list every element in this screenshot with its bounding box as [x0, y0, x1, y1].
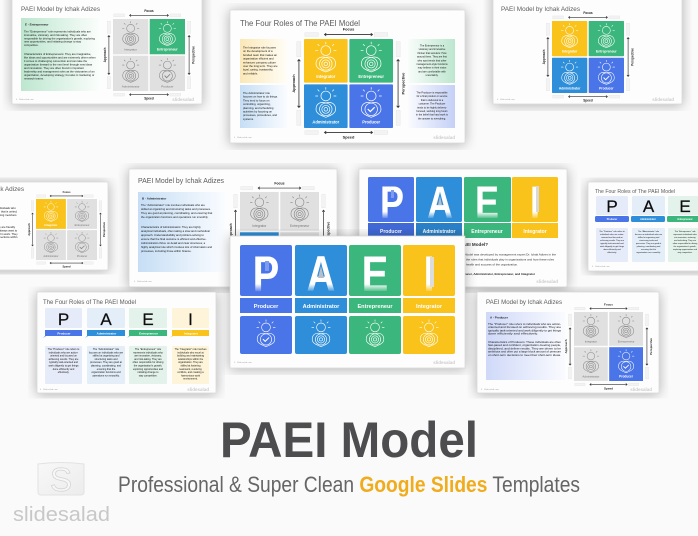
panel: producer description: The "Producer" role refers to individuals who are action- — [488, 322, 561, 326]
panel: entrepreneur description: competitive. — [24, 43, 39, 47]
matrix: four coloured roles: Producer — [362, 120, 381, 125]
card: Integrator: teamwork, resolving — [179, 368, 202, 371]
panel: entrepreneur description: innovative, visionary, and risk-taking. They are often — [24, 33, 88, 37]
panel: administrator description: The "Administrator" role involves individuals who are — [141, 203, 205, 207]
panel: integrator text: enhances company culture — [243, 60, 276, 64]
card: Producer: P — [606, 197, 618, 216]
card: Entrepreneur: exploring opportunities and — [133, 368, 164, 371]
card: Producer: P — [58, 310, 69, 329]
card: Producer: oriented and focused on — [601, 236, 623, 239]
card: Producer: typically task-oriented and — [49, 361, 79, 364]
card: Integrator: The "Integrator" role involves — [174, 348, 207, 351]
card: Administrator: structuring tasks and — [639, 239, 658, 242]
panel: producer text: in the belief that hard work is — [416, 114, 449, 117]
matrix: entrepreneur highlighted: Perspective — [191, 46, 195, 64]
matrix: administrator highlighted — [229, 181, 330, 277]
panel: administrator text: They tend to focus on — [243, 98, 270, 102]
panel: entrepreneur text: thinker that wonders: How — [418, 52, 447, 55]
panel: producer text: The Producer is responsible — [416, 92, 448, 94]
card: Administrator: organization functions and — [91, 371, 121, 374]
slide sheet — [477, 292, 659, 393]
panel: integrator text: The Integrator role focuses — [243, 46, 276, 50]
card: Integrator: organization. They are — [178, 361, 204, 364]
matrix: integrator highlighted: Approach — [27, 223, 31, 236]
role label Producer — [368, 223, 414, 238]
card: Integrator: harmonious work — [181, 374, 201, 377]
matrix: entrepreneur highlighted: Speed — [144, 97, 154, 101]
panel: administrator description: ensure that the final outcome is efficient and effective. — [141, 237, 207, 241]
footer: 4 Slidesalad.com — [592, 266, 610, 268]
card: Entrepreneur: E — [679, 197, 691, 216]
slide title: PAEI Model by Ichak Adizes — [21, 6, 101, 13]
panel: administrator text: controlling, organizing, — [243, 102, 271, 106]
card: Producer: achieving results. They are — [49, 358, 79, 361]
panel: administrator text: processes, procedures, and — [243, 113, 277, 117]
slide sheet — [493, 0, 682, 104]
slide: four role cards (right edge) — [588, 182, 698, 271]
matrix: administrator highlighted: Perspective — [326, 222, 330, 241]
slide: four role cards (bottom left) — [37, 292, 216, 393]
footer: 4 Slidesalad.com — [234, 137, 252, 139]
panel: producer text — [408, 85, 455, 128]
panel: administrator description: analytical individuals, often taking a slow and methodical — [141, 229, 210, 233]
panel: entrepreneur description: organization forward to the next level through new ideas — [24, 62, 93, 66]
panel: entrepreneur text — [408, 39, 455, 83]
card: Integrator: individuals who excel at — [177, 351, 204, 354]
matrix: four coloured roles: Perspective — [401, 72, 406, 94]
card: Administrator: ensuring that the — [97, 368, 116, 371]
matrix: administrator highlighted: Focus — [274, 181, 285, 185]
card: Administrator: processes. They are good at — [90, 361, 122, 364]
matrix: producer highlighted — [564, 302, 653, 390]
matrix: four coloured roles: Focus — [583, 11, 593, 15]
card: Entrepreneur: Entrepreneur — [139, 332, 159, 336]
panel: producer description: Characteristics of Producers: These individuals are often — [488, 340, 561, 344]
panel: entrepreneur text: management-style functions — [416, 63, 448, 66]
matrix: producer highlighted: Perspective — [649, 338, 653, 355]
card: Entrepreneur — [667, 196, 698, 262]
card: Entrepreneur: are innovative, visionary, — [134, 355, 162, 358]
panel: producer description: done efficiently and effectively. — [488, 332, 538, 336]
panel: producer text: tends to be highly delivery- — [417, 106, 447, 109]
matrix: four coloured roles: Speed — [343, 135, 355, 140]
slide sheet — [12, 0, 202, 104]
matrix: producer highlighted: Producer — [619, 375, 634, 379]
card: Integrator: relationships within the — [178, 358, 204, 361]
card: Entrepreneur: the organization's growth, — [674, 245, 697, 248]
panel: administrator description: the organization functions and operations run smoothly. — [141, 215, 209, 219]
footer: 4 Slidesalad.com — [16, 99, 34, 101]
matrix: producer highlighted: Focus — [604, 302, 613, 306]
matrix: four coloured roles: Entrepreneur — [358, 74, 384, 79]
subtitle: Professional & Super Clean Google Slides Templates — [118, 472, 580, 497]
panel: producer description: fast-paced and confident, organization-meeting people, — [488, 343, 561, 347]
panel: administrator description: B - Administrator — [142, 196, 167, 200]
slide sheet — [37, 292, 216, 393]
column: Producer — [240, 245, 292, 354]
card: Producer: done efficiently and — [603, 248, 621, 251]
card: Producer: work diligently to get things — [600, 245, 624, 248]
card: Entrepreneur: E — [142, 310, 154, 329]
panel: administrator description: processes, including those within finance. — [141, 249, 192, 253]
card: Producer: Producer — [57, 332, 71, 336]
panel: entrepreneur description: and innovation. They are often found in important — [24, 66, 84, 70]
panel: administrator description: Administrators thrive on detail and clear structures; a — [141, 241, 206, 245]
card: Administrator: organization runs smoothly. — [636, 251, 661, 254]
card: Producer: done efficiently and — [53, 368, 75, 371]
slide: PAEI letters with text (centre right) — [359, 169, 567, 287]
panel: producer description: ambitious and often put a large block amount of pressure — [488, 350, 561, 354]
column: Entrepreneur: E — [362, 246, 388, 302]
letter tile I: I — [530, 177, 540, 228]
watermark: slidesalad — [536, 279, 558, 284]
card: Producer: typically task-oriented and — [600, 242, 624, 245]
matrix: entrepreneur highlighted — [103, 9, 195, 101]
matrix: administrator highlighted: Approach — [229, 223, 233, 240]
slide sheet — [588, 182, 698, 271]
panel: entrepreneur description: leadership and management roles as the visionaries of an — [24, 70, 95, 74]
matrix: integrator highlighted: Entrepreneur — [75, 223, 90, 227]
matrix: four coloured roles — [542, 11, 634, 103]
panel: administrator text: systems. — [243, 117, 254, 121]
panel: producer text: customer. The Producer — [419, 103, 445, 106]
panel: entrepreneur description: research teams. — [24, 76, 44, 80]
card: Producer: individuals who are action- — [49, 351, 78, 354]
card: Administrator: ensuring that the — [641, 248, 657, 251]
panel: entrepreneur description: E - Entrepreneur — [25, 22, 49, 26]
panel: producer description — [486, 312, 565, 380]
card: Entrepreneur: stay competitive. — [139, 374, 158, 377]
card: Entrepreneur: The "Entrepreneur" role — [674, 230, 696, 233]
card: Administrator — [85, 308, 125, 384]
panel: entrepreneur description — [21, 18, 100, 91]
card: Integrator: conflicts, and creating a — [177, 371, 204, 374]
slide title: PAEI Model by Ichak Adizes — [486, 299, 563, 306]
panel: entrepreneur text: The Entrepreneur is a — [420, 44, 445, 48]
role label Administrator: Administrator — [423, 229, 455, 235]
card: Administrator: operations run smoothly. — [92, 374, 120, 377]
matrix: entrepreneur highlighted: Integrator — [124, 48, 137, 52]
card: Administrator: A — [100, 310, 112, 329]
panel: integrator text: organization efficient and — [243, 57, 274, 61]
column: Integrator — [403, 245, 455, 354]
matrix: four coloured roles: Perspective — [630, 48, 634, 66]
matrix: entrepreneur highlighted: Administrator — [122, 84, 140, 88]
text: what is the PAEI model: The PAEI Model was developed by management expert Dr. Ichak Adizes in the — [451, 252, 556, 256]
card: Producer: effectively. — [58, 371, 70, 374]
card: Administrator — [631, 196, 665, 262]
card: Entrepreneur: are innovative, visionary, — [674, 236, 696, 239]
card: Producer: Producer — [607, 218, 617, 221]
column: Administrator — [295, 245, 347, 354]
slide title: The Four Roles of The PAEI Model — [43, 300, 136, 306]
column: Entrepreneur — [349, 245, 401, 354]
matrix: producer highlighted: Entrepreneur — [618, 339, 635, 343]
card: Entrepreneur: stay competitive. — [678, 251, 693, 254]
watermark: slidesalad — [187, 387, 209, 392]
letter tile A: A — [427, 177, 453, 228]
letter tile A — [416, 177, 462, 228]
card: Integrator — [170, 308, 209, 384]
role label Entrepreneur: Entrepreneur — [471, 229, 503, 235]
panel: administrator description: Characteristics of Administrators: They are highly — [141, 225, 201, 229]
matrix: four coloured roles: Approach — [542, 50, 546, 64]
card: Producer: oriented and focused on — [50, 355, 78, 358]
footer: 4 Slidesalad.com — [40, 389, 58, 391]
panel: entrepreneur description: like ideas and opportunities and are extremely driven when — [24, 56, 96, 60]
slide sheet — [359, 169, 567, 287]
slide: four roles matrix (top centre) — [230, 10, 465, 143]
panel: integrator text: on the development of a — [243, 49, 273, 53]
card: Producer — [595, 196, 629, 262]
panel: producer text: the answer to everything. — [418, 117, 446, 120]
matrix: integrator highlighted: Integrator — [44, 223, 58, 227]
matrix: four coloured roles: Administrator — [559, 86, 581, 90]
matrix: four coloured roles: Speed — [583, 99, 593, 103]
panel: integrator description — [0, 206, 18, 243]
role label Producer: Producer — [380, 229, 402, 235]
slide: entrepreneur matrix (top left) — [12, 0, 202, 104]
matrix: four coloured roles: Administrator — [312, 120, 340, 125]
column: Producer: P — [253, 246, 279, 302]
slide title: PAEI Model by Ichak Adizes — [501, 6, 581, 13]
slide sheet — [129, 169, 337, 287]
matrix: entrepreneur highlighted: Producer — [161, 84, 173, 88]
slide: producer matrix (bottom right) — [477, 292, 659, 393]
wordmark: slidesalad — [13, 504, 110, 526]
column: Producer: Producer — [254, 304, 279, 310]
panel: producer description: A - Producer — [490, 316, 509, 320]
card: Entrepreneur: initiating change to — [138, 371, 159, 374]
panel: entrepreneur text: visionary and innovative — [419, 48, 446, 51]
card: Administrator: skilled at organizing and — [93, 355, 120, 358]
card: Producer: achieving results. They are — [600, 239, 625, 242]
card: Entrepreneur: often responsible for driving — [673, 242, 697, 245]
role label Entrepreneur — [464, 223, 511, 238]
card: Integrator: building and maintaining — [177, 355, 205, 358]
panel: administrator text: The Administrator role — [243, 91, 270, 95]
slide sheet — [230, 10, 465, 143]
text: what is the PAEI model: What is the PAEI Model? — [434, 242, 488, 247]
panel: administrator text: activities by focusing on — [243, 110, 273, 114]
letter tile I — [512, 177, 558, 228]
text: what is the PAEI model: The four roles: Producer, Administrator, Entrepreneur, and Integrator — [437, 272, 536, 276]
panel: integrator text: loyal, caring, trustworthy, — [243, 68, 273, 72]
card: Producer: individuals who are action- — [600, 233, 624, 236]
panel: producer text: that is delivered to a — [421, 99, 444, 102]
panel: entrepreneur description: organization, developing strategy, but also in marketing or — [24, 73, 94, 77]
card: Entrepreneur — [127, 308, 167, 384]
card: Entrepreneur: represents individuals who — [673, 233, 698, 236]
card: Entrepreneur: often responsible for driving — [133, 361, 164, 364]
card: Administrator: The "Administrator" role — [93, 348, 120, 351]
footer: 4 Slidesalad.com — [481, 389, 499, 391]
main title: PAEI Model — [220, 412, 478, 468]
card: Integrator: I — [188, 310, 193, 329]
matrix: integrator highlighted: Producer — [77, 254, 87, 258]
card: Integrator: skilled at fostering — [180, 364, 201, 368]
card: Entrepreneur: and risk-taking. They are — [674, 239, 697, 242]
panel: entrepreneur description: it comes to challenging convention and can take the — [24, 59, 88, 63]
card: Integrator: Integrator — [184, 332, 199, 336]
panel: entrepreneur description: Characteristics of Entrepreneurs: They are imaginative, — [24, 52, 91, 56]
panel: integrator text: over the long term. They are — [243, 64, 278, 68]
text: what is the PAEI model: contribute to the overall health and success of the organization. — [434, 262, 518, 266]
matrix: integrator highlighted: Speed — [62, 264, 71, 268]
matrix: four coloured roles — [291, 27, 406, 140]
panel: producer text: for a final product or service — [417, 95, 448, 98]
card: Entrepreneur: and risk-taking. They are — [134, 358, 162, 361]
matrix: four coloured roles: Producer — [599, 86, 614, 90]
panel: entrepreneur text: and are comfortable with — [418, 70, 446, 73]
card: Administrator: processes. They are good at — [636, 242, 662, 245]
letter tile E — [464, 177, 511, 228]
panel: producer description: disciplined, and deliver results. They are driven to be — [488, 346, 562, 350]
matrix: administrator highlighted: Entrepreneur — [290, 224, 310, 228]
panel: integrator text — [240, 39, 287, 83]
card: Administrator: A — [643, 197, 655, 216]
matrix: entrepreneur highlighted: Focus — [144, 9, 154, 13]
card: Administrator: The "Administrator" role — [638, 230, 660, 233]
matrix: integrator highlighted: Perspective — [102, 221, 106, 237]
matrix: four coloured roles: Focus — [343, 27, 355, 32]
slide: administrator matrix (centre left) — [129, 169, 337, 287]
card: Administrator: focuses on individuals who are — [89, 351, 124, 354]
card: Producer: The "Producer" role refers to — [48, 348, 80, 351]
card: Producer: The "Producer" role refers to — [599, 230, 626, 233]
text: what is the PAEI model — [434, 242, 556, 276]
panel: producer text: focused, working long hours — [416, 110, 448, 113]
card: Administrator: skilled at organizing and — [638, 236, 659, 239]
panel: integrator text: bonded team that makes an — [243, 53, 278, 57]
text: what is the PAEI model: 1970s. It describes the roles that individuals play in organizations and how these roles — [440, 258, 554, 262]
panel: entrepreneur text: may believe in their vision — [418, 67, 447, 70]
slide: PAEI letters (centre front) — [230, 236, 465, 368]
role label Administrator — [416, 223, 462, 238]
card: Administrator: Administrator — [97, 332, 117, 336]
panel: producer description: on short-term decisions to meet their short-term ideas. — [488, 353, 561, 357]
letter tile P — [368, 177, 414, 228]
panel: administrator description — [138, 192, 225, 272]
slide title: PAEI Model by Ichak Adizes — [138, 178, 224, 185]
panel: administrator text: focuses on how to do things. — [243, 95, 278, 99]
slide: colour matrix (top right) — [493, 0, 682, 104]
column: Integrator: Integrator — [416, 304, 443, 310]
watermark: slidesalad — [652, 97, 674, 102]
panel: producer description: typically task-oriented and work diligently to get things — [488, 328, 562, 332]
matrix: four coloured roles: Integrator — [316, 74, 336, 79]
watermark: slidesalad — [433, 360, 455, 365]
panel: administrator text — [240, 85, 287, 128]
matrix: producer highlighted: Administrator — [582, 375, 599, 379]
panel: entrepreneur text: uncertainty. — [426, 74, 439, 77]
panel: administrator description: They are good at planning, coordinating, and ensuring that — [141, 211, 212, 215]
watermark: slidesalad — [630, 387, 652, 392]
logo: slidesalad — [13, 461, 110, 526]
matrix: four coloured roles: Integrator — [562, 50, 578, 54]
panel: administrator description: skilled at organizing and structuring tasks and processes. — [141, 207, 211, 211]
card: Administrator: planning, coordinating and — [637, 245, 660, 248]
panel: entrepreneur text: who spot trends that other — [418, 59, 447, 62]
slide title: The Four Roles of The PAEI Model — [240, 19, 360, 28]
letter tile E: E — [475, 177, 499, 228]
matrix: entrepreneur highlighted: Approach — [103, 48, 107, 62]
column: Administrator: Administrator — [303, 304, 340, 310]
card: Entrepreneur: the organization's growth, — [134, 364, 163, 368]
card: Entrepreneur: Entrepreneur — [677, 218, 693, 221]
matrix: administrator highlighted: Integrator — [252, 224, 267, 228]
card: Administrator: planning, coordinating, and — [91, 364, 122, 368]
column: Entrepreneur: Entrepreneur — [357, 304, 393, 310]
matrix: four coloured roles: Approach — [291, 74, 296, 93]
footer: 4 Slidesalad.com — [134, 281, 152, 283]
card: Entrepreneur: exploring opportunities and — [673, 248, 697, 251]
card: Producer: effectively. — [607, 251, 617, 254]
card: Administrator: focuses on individuals who are — [635, 234, 663, 236]
matrix: producer highlighted: Integrator — [585, 339, 597, 343]
card: Producer — [43, 308, 82, 384]
card: Administrator: structuring tasks and — [94, 358, 118, 361]
panel: producer description: oriented and focused on achieving results. They are — [488, 325, 562, 329]
slide title: The Four Roles of The PAEI Model — [595, 189, 675, 195]
icon: S cube: S — [50, 461, 72, 498]
watermark: slidesalad — [433, 135, 455, 140]
card: Producer: work diligently to get things — [48, 364, 79, 368]
panel: administrator description: approach. Understandability and problem-solving to — [141, 233, 204, 237]
matrix: integrator highlighted — [27, 190, 106, 268]
card: Integrator: environment. — [183, 378, 198, 381]
role label Integrator: Integrator — [523, 229, 547, 235]
letter tile P: P — [380, 177, 404, 228]
column: Integrator: I — [423, 246, 435, 302]
panel: entrepreneur text: around them. They are first — [417, 56, 447, 59]
role label Integrator — [512, 223, 558, 238]
card: Entrepreneur: represents individuals who — [133, 351, 163, 354]
panel: administrator text: planning, and scheduling — [243, 106, 274, 110]
slide sheet — [0, 182, 108, 270]
matrix: four coloured roles: Entrepreneur — [596, 50, 617, 54]
card: Administrator: Administrator — [640, 218, 656, 221]
panel: entrepreneur description: The "Entrepreneur" role represents individuals who are — [24, 30, 91, 34]
footer: 4 Slidesalad.com — [497, 99, 515, 101]
matrix: producer highlighted: Speed — [604, 386, 613, 390]
matrix: integrator highlighted: Focus — [63, 190, 71, 194]
panel: entrepreneur description: responsible for driving the organization's growth, exploring — [24, 36, 95, 40]
footer: 3 Slidesalad.com — [234, 362, 252, 364]
watermark: slidesalad — [172, 97, 194, 102]
panel: administrator description: highly analytical role which involves lots of information and — [141, 245, 213, 249]
matrix: entrepreneur highlighted: Entrepreneur — [157, 48, 178, 52]
panel: entrepreneur description: new opportunities, and initiating change to stay — [24, 40, 82, 44]
column: Administrator: A — [307, 246, 335, 302]
matrix: producer highlighted: Approach — [564, 339, 568, 354]
slide: integrator matrix (left edge) — [0, 182, 108, 270]
card: Entrepreneur: The "Entrepreneur" role — [135, 348, 162, 351]
panel: integrator text: and reliable. — [243, 71, 258, 75]
matrix: integrator highlighted: Administrator — [43, 254, 59, 258]
slide sheet — [230, 236, 465, 368]
